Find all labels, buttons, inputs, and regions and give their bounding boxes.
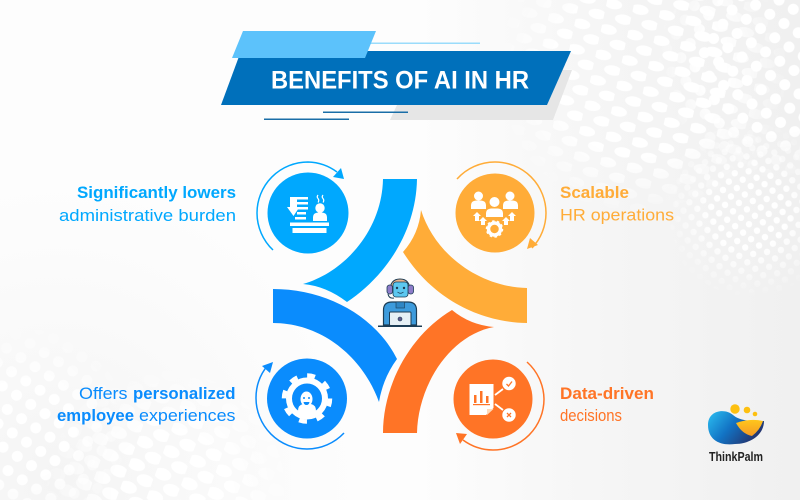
logo wordmark: ThinkPalm (709, 450, 763, 464)
disc (267, 358, 347, 438)
petal: blue bottom-left (273, 289, 397, 402)
banner shadow (390, 70, 572, 120)
cyclic arrow (257, 162, 337, 250)
text: offers personalized employee experiences: employee (57, 406, 134, 425)
item: administrative burden icon (257, 162, 348, 254)
text: data-driven decisions (560, 384, 654, 425)
logo wave (708, 411, 764, 444)
white glyph (471, 192, 518, 237)
banner main shape (221, 51, 571, 105)
robot laptop (390, 312, 411, 326)
text: offers personalized employee experiences: Offers (79, 384, 128, 403)
white glyph (287, 195, 329, 233)
banner underline upper (323, 112, 408, 113)
item: data-driven decisions icon (454, 360, 544, 450)
banner accent line (370, 42, 480, 44)
item: scalable HR icon (456, 162, 546, 252)
text: significantly lowers administrative burden: administrative burden (59, 206, 236, 225)
item: personalized experiences icon (256, 358, 347, 449)
cyclic arrow (457, 162, 546, 248)
text: offers personalized employee experiences: personalized (133, 384, 236, 403)
robot headset band (390, 279, 410, 291)
logo dots (730, 404, 740, 414)
text: data-driven decisions: decisions (560, 406, 622, 425)
robot head (393, 282, 408, 297)
disc (268, 172, 348, 254)
title banner (221, 31, 572, 120)
petal: amber top-right (403, 210, 527, 323)
petal: cyan top-left (303, 179, 417, 302)
text: scalable HR operations: Scalable (560, 183, 629, 202)
text: significantly lowers administrative burden: Significantly lowers (77, 183, 236, 202)
disc (454, 360, 532, 438)
disc (456, 174, 534, 252)
petal: orange bottom-right (383, 310, 494, 433)
icon: central robot at laptop (378, 279, 422, 327)
robot body (384, 302, 416, 325)
banner light tab (232, 31, 376, 58)
text: significantly lowers administrative burden (59, 183, 236, 225)
cyclic arrow (256, 365, 344, 449)
text: data-driven decisions: Data-driven (560, 384, 654, 403)
white document glyph (470, 377, 516, 422)
cyclic arrow (463, 362, 544, 450)
text: scalable HR operations: HR operations (560, 206, 674, 224)
text: scalable HR operations (560, 183, 674, 224)
robot ear cups (387, 285, 392, 294)
text: offers personalized employee experiences: experiences (139, 406, 236, 425)
logo: ThinkPalm (708, 404, 764, 464)
title text: BENEFITS OF AI IN HR (271, 66, 529, 94)
text: offers personalized employee experiences (57, 384, 236, 425)
banner underline lower (264, 118, 349, 120)
white gear glyph (284, 376, 330, 422)
